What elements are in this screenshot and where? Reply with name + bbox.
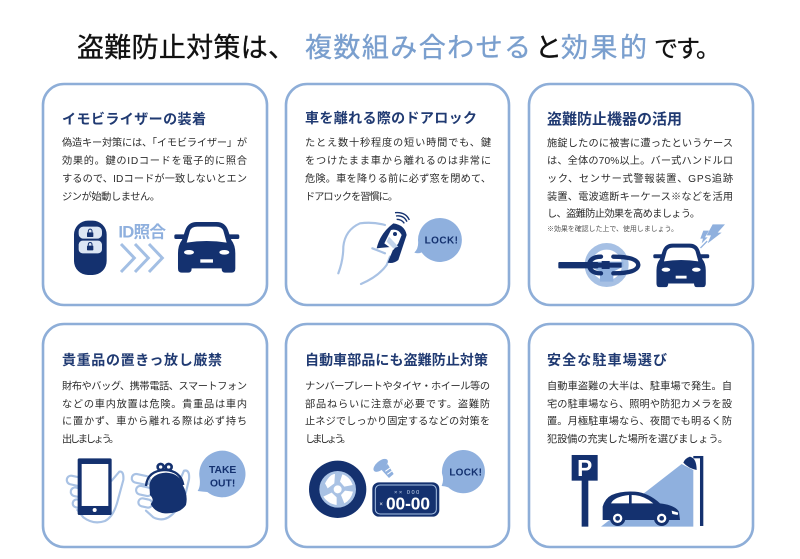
icon: hand locking with key — [338, 213, 462, 284]
text block: safe parking: 置。月極駐車場なら、夜間でも明るく防 — [547, 414, 732, 428]
text block: immobilizer: するので、IDコードが一致しないとエン — [62, 172, 247, 185]
text block: anti-theft devices: し、盗難防止効果を高めましょう。 — [547, 207, 700, 220]
icon: key fob — [377, 223, 407, 263]
title — [77, 26, 720, 65]
text block: valuables: などの車内放置は危険。貴重品は車内 — [62, 398, 247, 410]
title: 効果的 — [561, 26, 647, 65]
icon: parked car — [603, 491, 680, 526]
text block: immobilizer: ジンが始動しません。 — [62, 190, 160, 203]
heading: valuables: 貴重品の置きっ放し厳禁 — [62, 352, 222, 368]
label: ID check: ID照合 — [118, 223, 166, 242]
text block: anti-theft devices — [547, 136, 733, 220]
text block: car parts: 止ネジでしっかり固定するなどの対策を — [305, 414, 490, 428]
text block: valuables: 財布やバッグ、携帯電話、スマートフォン — [62, 380, 247, 392]
heading: safe parking: 安全な駐車場選び — [547, 352, 667, 368]
note: ※効果を確認した上で、使用しましょう。 — [547, 224, 678, 233]
callout: lock — [442, 450, 485, 493]
text block: car parts: ナンバープレートやタイヤ・ホイール等の — [305, 380, 490, 392]
callout: lock: LOCK! — [425, 236, 458, 247]
text block: car parts: しましょう。 — [305, 434, 351, 446]
panel: car parts — [286, 324, 509, 547]
icon: license plate: ×× 000 — [394, 490, 419, 496]
text block: door lock — [305, 136, 491, 203]
text block: immobilizer: 効果的。鍵のIDコードを電子的に照合 — [62, 154, 247, 167]
icon: license plate — [372, 482, 439, 517]
text block: valuables: に置かず、車から離れる際は必ず持ち — [62, 414, 247, 428]
text block: safe parking: 犯設備の充実した場所を選びましょう。 — [547, 432, 728, 446]
panel: valuables — [43, 324, 267, 547]
callout: take out: TAKE — [209, 465, 236, 476]
panel: door lock — [286, 84, 509, 305]
icon: steering wheel lock — [558, 246, 638, 284]
text block: valuables: 出しましょう。 — [62, 434, 119, 446]
arrow: chevrons — [121, 244, 162, 272]
icon: smart key — [74, 221, 107, 275]
icon: car front — [174, 222, 239, 273]
text block: safe parking: 宅の駐車場なら、照明や防犯カメラを設 — [547, 398, 732, 410]
icon: lightning bolts — [700, 224, 725, 248]
icon: parts — [309, 450, 485, 518]
panel: safe parking — [529, 324, 753, 547]
icon: parking sign: P — [577, 455, 592, 481]
icon: car with alarm — [653, 244, 709, 287]
text block: car parts: 部品ねらいに注意が必要です。盗難防 — [305, 398, 490, 410]
icon: license plate: × — [379, 502, 383, 508]
icon: take out valuables — [66, 451, 245, 522]
title: 複数組み合わせる — [305, 26, 531, 65]
icon: license plate: 00-00 — [386, 493, 430, 513]
callout: take out — [198, 451, 245, 497]
text block: safe parking: 自動車盗難の大半は、駐車場で発生。自 — [547, 380, 732, 392]
text block: door lock: 危険。車を降りる前に必ず窓を閉めて、 — [305, 172, 491, 185]
title: と — [535, 26, 562, 65]
text block: valuables — [62, 380, 247, 446]
panel: immobilizer — [43, 84, 267, 305]
text block: car parts — [305, 380, 490, 446]
text block: anti-theft devices: 装置、電波遮断キーケース※などを活用 — [547, 190, 733, 203]
icon: street lamp — [683, 456, 703, 526]
icon: immobilizer key to car — [74, 221, 239, 275]
heading: car parts: 自動車部品にも盗難防止対策 — [305, 352, 488, 368]
text block: anti-theft devices: は、全体の70%以上。バー式ハンドルロ — [547, 154, 733, 167]
text block: safe parking — [547, 380, 732, 446]
title: です。 — [654, 29, 720, 64]
text block: anti-theft devices: 施錠したのに被害に遭ったというケース — [547, 136, 733, 150]
panel: anti-theft devices — [529, 84, 753, 305]
text block: immobilizer: 偽造キー対策には、「イモビライザー」が — [62, 136, 247, 149]
text block: door lock: ドアロックを習慣に。 — [305, 190, 398, 203]
icon: screw — [371, 456, 394, 478]
text block: door lock: たとえ数十秒程度の短い時間でも、鍵 — [305, 136, 491, 149]
title: 盗難防止対策は、 — [77, 26, 295, 65]
icon: devices — [558, 224, 725, 287]
icon: hand with phone — [66, 458, 123, 522]
icon: parking — [572, 455, 703, 527]
heading: door lock: 車を離れる際のドアロック — [305, 110, 477, 126]
text block: anti-theft devices: ック、センサー式警報装置、GPS追跡 — [547, 172, 733, 185]
icon: hand with purse — [131, 464, 189, 519]
callout: lock: LOCK! — [449, 467, 482, 478]
callout: take out: OUT! — [210, 478, 235, 489]
icon: signal waves — [395, 213, 409, 223]
icon: light beam — [601, 464, 693, 527]
heading: immobilizer: イモビライザーの装着 — [62, 111, 206, 127]
text block: immobilizer — [62, 136, 247, 203]
icon: tire — [309, 461, 366, 518]
heading: anti-theft devices: 盗難防止機器の活用 — [547, 110, 682, 128]
text block: door lock: をつけたまま車から離れるのは非常に — [305, 154, 491, 167]
icon: hand outline — [338, 223, 390, 284]
